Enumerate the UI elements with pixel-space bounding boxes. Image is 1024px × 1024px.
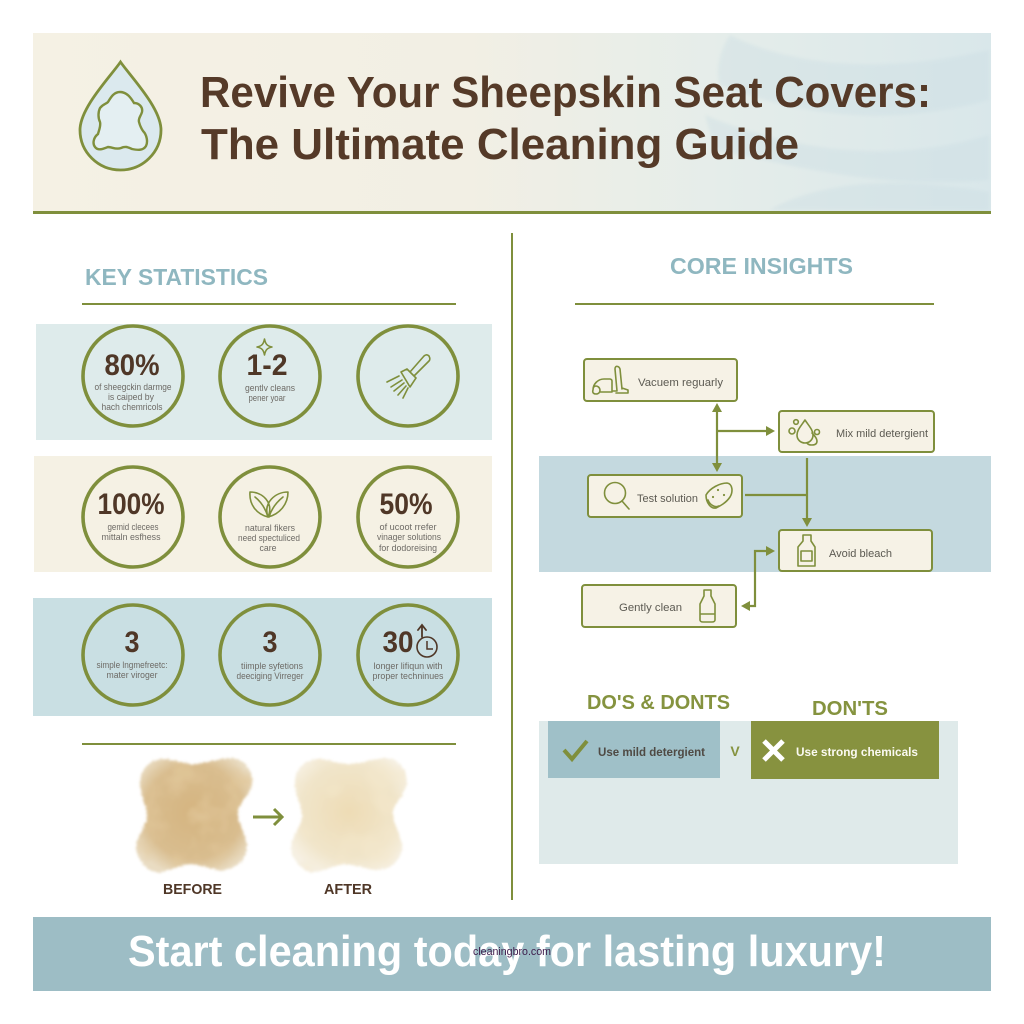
arrow: vacuum to test xyxy=(717,408,807,606)
stat: 30 longer lifespan: proper techninues xyxy=(372,671,444,681)
stat: 3 ingredients: 3 xyxy=(124,626,140,659)
stat: 3 solutions: tiimple syfetions xyxy=(241,661,303,671)
stat: 3 solutions: 3 xyxy=(262,626,278,659)
stat: leaf icon: care xyxy=(260,543,276,553)
stat: 50%: vinager solutions xyxy=(377,532,441,542)
header banner xyxy=(33,33,991,214)
before and after comparison xyxy=(82,743,456,898)
stat: 50% xyxy=(358,467,458,567)
stat: 50%: of ucoot rrefer xyxy=(380,522,436,532)
stat: 30 longer lifespan xyxy=(358,605,458,705)
stat: 3 ingredients xyxy=(83,605,183,705)
title: The Ultimate Cleaning Guide xyxy=(201,120,799,169)
step: test solution xyxy=(588,475,742,517)
panel: do's and don'ts xyxy=(539,692,958,864)
title: Revive Your Sheepskin Seat Covers: xyxy=(200,68,931,117)
icon: sponge xyxy=(706,483,732,508)
label: after: AFTER xyxy=(324,881,372,898)
heading: do's and donts: DO'S & DONTS xyxy=(587,692,730,714)
sheepskin: after xyxy=(291,758,407,872)
panel: statistics row 1 xyxy=(36,324,492,440)
title xyxy=(200,68,931,169)
arrow: before to after xyxy=(253,809,282,825)
card: do xyxy=(548,721,720,778)
stat: 3 solutions xyxy=(220,605,320,705)
stat: leaf icon: need spectuliced xyxy=(238,533,300,543)
card: do: Use mild detergient xyxy=(598,745,705,759)
stat: 3 solutions: deeciging Virreger xyxy=(236,671,304,681)
footer banner xyxy=(33,917,991,991)
step: vacuum regularly: Vacuem reguarly xyxy=(638,377,723,389)
stat: 30 longer lifespan: 30 xyxy=(382,626,414,659)
step: avoid bleach xyxy=(779,530,932,571)
heading: key statistics: KEY STATISTICS xyxy=(85,264,268,290)
icon: water drop with sheepskin xyxy=(80,62,161,170)
stat: 100%: 100% xyxy=(98,488,164,521)
stat: 1-2 xyxy=(220,326,320,426)
card: don't: Use strong chemicals xyxy=(796,745,918,759)
stat: leaf icon xyxy=(220,467,320,567)
stat: 1-2: pener yoar xyxy=(248,393,286,403)
stat: brush icon xyxy=(358,326,458,426)
stat: 3 ingredients: simple lngmefreetc: xyxy=(96,660,168,670)
step: mix mild detergent: Mix mild detergient xyxy=(836,428,929,440)
stat: leaf icon: natural fikers xyxy=(245,523,295,533)
stat: 80%: hach chemricols xyxy=(102,402,163,412)
stat: 100%: mittaln esfhess xyxy=(102,532,161,542)
step: mix mild detergent xyxy=(779,411,934,452)
step: gently clean: Gently clean xyxy=(619,602,682,614)
stat: 100%: gemid clecees xyxy=(108,522,159,532)
panel: statistics row 2 xyxy=(34,456,492,572)
stat: 50%: for dodoreising xyxy=(379,543,437,553)
flow chart xyxy=(539,359,991,627)
step: test solution: Test solution xyxy=(637,493,698,505)
stat: 80%: 80% xyxy=(104,349,160,382)
watermark: cleaningbro.com xyxy=(473,946,551,958)
column divider xyxy=(511,233,513,900)
separator letter: V xyxy=(730,743,740,759)
label: before: BEFORE xyxy=(163,881,222,898)
step: vacuum regularly xyxy=(584,359,737,401)
step: gently clean xyxy=(582,585,736,627)
stat: 1-2: 1-2 xyxy=(246,349,288,382)
stat: 80%: is caiped by xyxy=(108,392,154,402)
stat: 50%: 50% xyxy=(380,488,432,521)
stat: 1-2: gentlv cleans xyxy=(245,383,295,393)
stat: 30 longer lifespan: longer lifiqun with xyxy=(374,661,442,671)
stat: 80% xyxy=(83,326,183,426)
panel: statistics row 3 xyxy=(33,598,492,716)
heading: don'ts: DON'TS xyxy=(812,698,888,720)
step: avoid bleach: Avoid bleach xyxy=(829,548,892,560)
card: don't xyxy=(751,721,939,779)
heading: core insights: CORE INSIGHTS xyxy=(670,253,853,279)
stat: 100% xyxy=(83,467,183,567)
stat: 80%: of sheegckin darmge xyxy=(94,382,172,392)
call to action: Start cleaning today for lasting luxury! xyxy=(128,927,886,976)
sheepskin: before xyxy=(136,758,252,872)
stat: 3 ingredients: mater viroger xyxy=(106,670,158,680)
